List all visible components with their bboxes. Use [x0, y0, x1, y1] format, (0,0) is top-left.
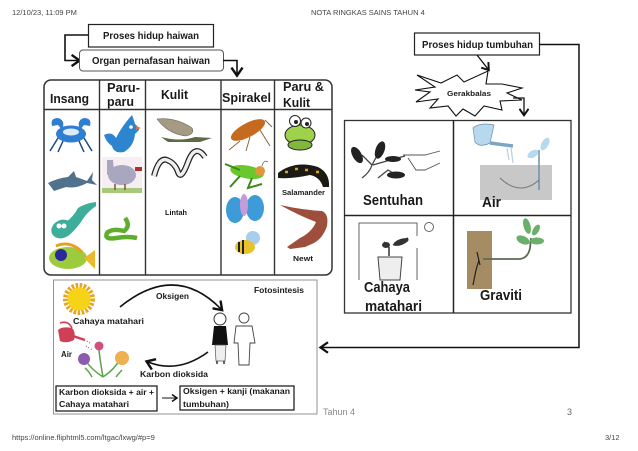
icon: sun	[66, 286, 92, 312]
panel: photosynthesis	[54, 280, 317, 414]
label: Cahaya matahari	[364, 279, 422, 315]
callout: Gerakbalas	[415, 71, 522, 116]
icon: woman	[212, 313, 228, 364]
arrow: Oksigen	[120, 285, 221, 309]
box: inputs: Cahaya matahari	[59, 400, 129, 409]
browser header title: NOTA RINGKAS SAINS TAHUN 4	[311, 8, 425, 17]
icon: salamander	[278, 165, 329, 187]
icon: worm body	[154, 151, 205, 176]
box: inputs	[56, 386, 157, 411]
icon: touch plant	[349, 140, 440, 178]
label: Sentuhan: Sentuhan	[363, 192, 423, 209]
icon: newt	[280, 205, 327, 249]
browser footer page count: 3/12	[605, 433, 620, 442]
icon: grasshopper	[225, 161, 268, 188]
callout: Gerakbalas: Gerakbalas	[447, 89, 491, 98]
arrow: tumbuhan to Gerakbalas	[477, 55, 488, 69]
box: Organ pernafasan haiwan	[80, 50, 224, 71]
label: Newt: Newt	[293, 254, 314, 263]
icon: flowers	[78, 342, 129, 377]
label: Cahaya matahari: Cahaya matahari	[73, 316, 144, 326]
label: Lintah: Lintah	[165, 208, 187, 217]
box: outputs	[180, 386, 294, 410]
table headings: Paru &	[283, 79, 324, 94]
box: Proses hidup tumbuhan: Proses hidup tumbuhan	[422, 40, 533, 51]
icon: worm outline	[154, 151, 205, 176]
icon: watering and seedling	[473, 124, 552, 200]
icon: snake	[106, 218, 137, 238]
icon: man	[234, 313, 255, 365]
icon: tadpole	[48, 202, 96, 242]
arrow: inputs to outputs	[162, 397, 176, 399]
arrow: organ to table	[223, 60, 237, 74]
label: Karbon dioksida: Karbon dioksida	[140, 369, 208, 379]
table headings: Insang	[50, 91, 89, 106]
label: Cahaya matahari: Cahaya	[364, 279, 411, 296]
label: Fotosintesis: Fotosintesis	[254, 286, 305, 295]
box: Organ pernafasan haiwan: Organ pernafasan haiwan	[92, 55, 210, 67]
browser footer url: https://online.fliphtml5.com/ltgac/lxwg/#p=9	[12, 433, 155, 442]
arrow: haiwan to organ	[65, 35, 88, 60]
icon: cockroach	[228, 115, 272, 151]
box: outputs: Oksigen + kanji (makanan	[183, 387, 290, 396]
label: Salamander: Salamander	[282, 188, 325, 197]
label: Air: Air	[61, 349, 73, 359]
table headings: Spirakel	[222, 90, 271, 105]
icon: shark	[48, 171, 97, 191]
label: Graviti: Graviti	[480, 287, 522, 304]
icon: frog	[285, 116, 315, 150]
page footer: page number: 3	[567, 407, 572, 417]
label: Air: Air	[482, 194, 501, 211]
arrow: Karbon dioksida	[148, 352, 208, 366]
panel: animal respiration table	[44, 79, 332, 275]
table headings	[50, 79, 324, 110]
icon: bee	[235, 231, 260, 254]
icon: butterfly	[226, 194, 264, 223]
box: Proses hidup haiwan	[88, 24, 214, 47]
label: Oksigen: Oksigen	[156, 291, 189, 301]
panel: plant response grid	[344, 120, 571, 315]
arrow: tumbuhan to photosynthesis	[322, 44, 579, 348]
icon: hen	[102, 157, 142, 193]
icon: watering can	[58, 322, 93, 350]
page footer: document title: Tahun 4	[323, 407, 355, 417]
icon: crab	[50, 118, 92, 152]
icon: gravity plant	[467, 217, 544, 289]
box: inputs: Karbon dioksida + air +	[59, 388, 154, 397]
label: Cahaya matahari: matahari	[365, 298, 422, 315]
icon: blue bird	[104, 115, 141, 152]
box: Proses hidup haiwan: Proses hidup haiwan	[103, 30, 199, 42]
arrow: Gerakbalas to grid	[513, 98, 524, 114]
table headings: paru	[107, 94, 134, 109]
box: Proses hidup tumbuhan	[414, 33, 540, 55]
box: outputs: tumbuhan)	[183, 400, 229, 409]
table headings: Kulit	[161, 87, 189, 102]
browser header date: 12/10/23, 11:09 PM	[12, 8, 77, 17]
table headings: Paru-	[107, 80, 140, 95]
table headings: Kulit	[283, 95, 311, 110]
icon: fish	[49, 244, 95, 269]
icon: snail	[157, 119, 212, 142]
icon: pot in box	[359, 222, 434, 280]
